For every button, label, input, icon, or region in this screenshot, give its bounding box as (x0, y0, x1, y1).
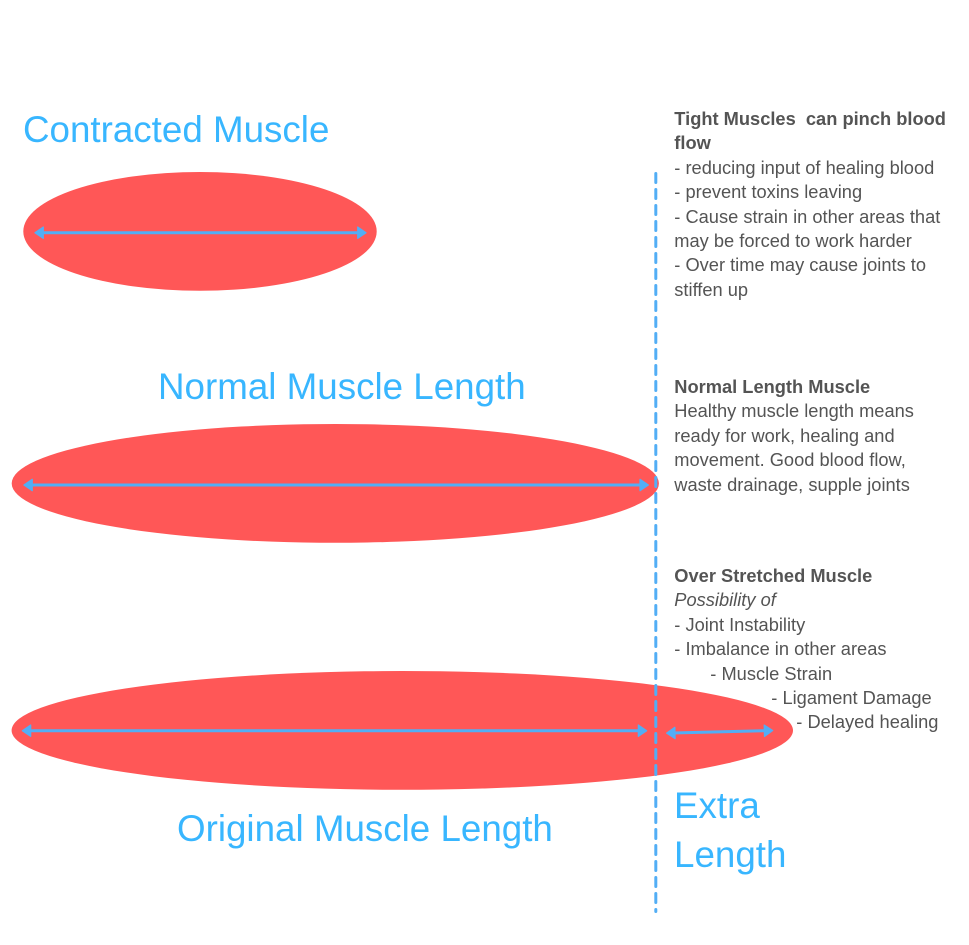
text: over stretched muscle: Possibility of (674, 589, 776, 610)
text: normal length muscle (674, 376, 914, 495)
text: normal length muscle: Healthy muscle length means (674, 400, 914, 421)
dashed reference line (654, 174, 657, 912)
text: tight muscles: - Over time may cause joints to (674, 254, 926, 275)
text: tight muscles: - Cause strain in other areas that (674, 206, 940, 227)
text: tight muscles: flow (674, 132, 711, 153)
contracted muscle ellipse (23, 172, 377, 291)
text: tight muscles: Tight Muscles can pinch blood (674, 108, 946, 129)
text: tight muscles: - prevent toxins leaving (674, 181, 862, 202)
heading: extra length: Length (674, 834, 786, 875)
text: normal length muscle: waste drainage, supple joints (674, 474, 910, 495)
heading: extra length: Extra (674, 785, 760, 826)
text: over stretched muscle: - Imbalance in other areas (674, 638, 886, 659)
text: over stretched muscle: Over Stretched Muscle (674, 565, 872, 586)
heading: extra length (674, 785, 786, 875)
text: over stretched muscle: - Delayed healing (796, 711, 938, 732)
text: tight muscles: stiffen up (674, 279, 748, 300)
text: normal length muscle: ready for work, healing and (674, 425, 895, 446)
original length arrow (29, 729, 640, 732)
heading: normal muscle length: Normal Muscle Length (158, 366, 526, 407)
text: over stretched muscle: - Joint Instability (674, 614, 805, 635)
overstretched muscle ellipse (12, 671, 793, 790)
text: over stretched muscle (674, 565, 938, 732)
text: normal length muscle: movement. Good blood flow, (674, 449, 906, 470)
heading: original muscle length: Original Muscle Length (177, 808, 553, 849)
text: tight muscles: - reducing input of healing blood (674, 157, 934, 178)
normal muscle ellipse (12, 424, 659, 543)
text: tight muscles (674, 108, 946, 300)
heading: contracted muscle: Contracted Muscle (23, 109, 329, 150)
text: over stretched muscle: - Muscle Strain (710, 663, 832, 684)
extra length arrow (673, 731, 766, 733)
text: over stretched muscle: - Ligament Damage (771, 687, 932, 708)
normal length arrow (30, 484, 642, 486)
contracted length arrow (41, 231, 360, 234)
text: tight muscles: may be forced to work harder (674, 230, 912, 251)
text: normal length muscle: Normal Length Muscle (674, 376, 870, 397)
